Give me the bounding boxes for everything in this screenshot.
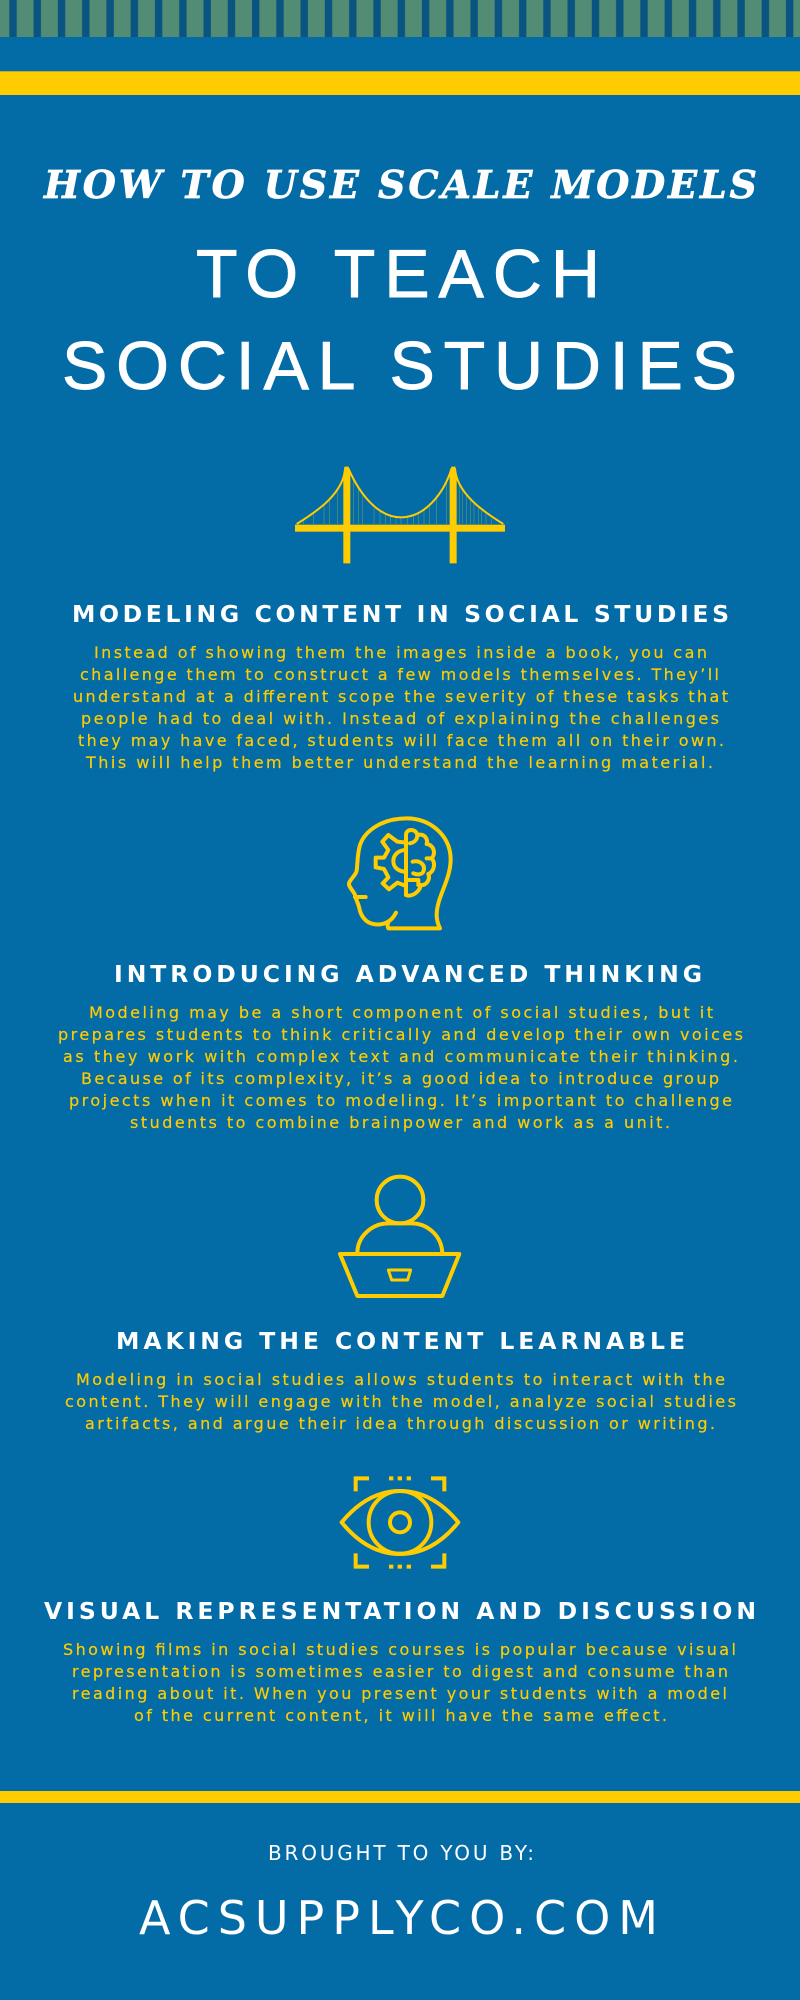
body text: Because of its complexity, it’s a good idea to introduce group [81, 1069, 719, 1088]
icon: suspension bridge [295, 467, 505, 563]
body text: prepares students to think critically and develop their own voices [58, 1025, 743, 1044]
icon: person at laptop [340, 1177, 459, 1296]
body text: challenge them to construct a few models themselves. They’ll [80, 665, 719, 684]
body text: content. They will engage with the model, analyze social studies [65, 1392, 736, 1411]
icon: head with gear and brain [349, 818, 451, 928]
body text: Modeling in social studies allows students to interact with the [76, 1370, 725, 1389]
section: modeling content in social studies [72, 467, 729, 772]
body text: people had to deal with. Instead of explaining the challenges [81, 709, 719, 728]
body text: representation is sometimes easier to digest and consume than [72, 1662, 728, 1681]
body text: Instead of showing them the images inside a book, you can [94, 643, 707, 662]
title: SOCIAL STUDIES [62, 328, 737, 404]
section: making the content learnable [65, 1177, 736, 1433]
body text: Modeling may be a short component of social studies, but it [89, 1003, 713, 1022]
body text: as they work with complex text and communicate their thinking. [63, 1047, 738, 1066]
heading: INTRODUCING ADVANCED THINKING [114, 960, 702, 988]
body text: they may have faced, students will face them all on their own. [78, 731, 724, 750]
heading: VISUAL REPRESENTATION AND DISCUSSION [44, 1597, 756, 1625]
section: visual representation and discussion [44, 1478, 756, 1725]
body text: projects when it comes to modeling. It’s important to challenge [69, 1091, 732, 1110]
icon: eye in viewfinder [342, 1478, 458, 1567]
top yellow bar [0, 71, 800, 95]
body text: This will help them better understand the learning material. [85, 753, 713, 772]
title [43, 162, 757, 404]
title: TO TEACH [196, 236, 600, 312]
body text: understand at a different scope the severity of these tasks that [73, 687, 728, 706]
title: HOW TO USE SCALE MODELS [43, 162, 757, 207]
bottom yellow bar [0, 1791, 800, 1803]
footer text: BROUGHT TO YOU BY: [268, 1841, 534, 1865]
footer text: ACSUPPLYCO.COM [139, 1891, 658, 1945]
body text: of the current content, it will have the same effect. [134, 1706, 667, 1725]
body text [63, 1640, 736, 1725]
top striped band [0, 0, 800, 37]
body text: Showing films in social studies courses is popular because visual [63, 1640, 736, 1659]
body text [65, 1370, 736, 1433]
heading: MAKING THE CONTENT LEARNABLE [116, 1327, 685, 1355]
heading: MODELING CONTENT IN SOCIAL STUDIES [72, 600, 729, 628]
section: introducing advanced thinking [58, 818, 743, 1132]
body text [73, 643, 728, 772]
body text: students to combine brainpower and work as a unit. [130, 1113, 670, 1132]
body text: reading about it. When you present your students with a model [72, 1684, 727, 1703]
body text: artifacts, and argue their idea through discussion or writing. [85, 1414, 715, 1433]
body text [58, 1003, 743, 1132]
footer text [139, 1841, 658, 1945]
